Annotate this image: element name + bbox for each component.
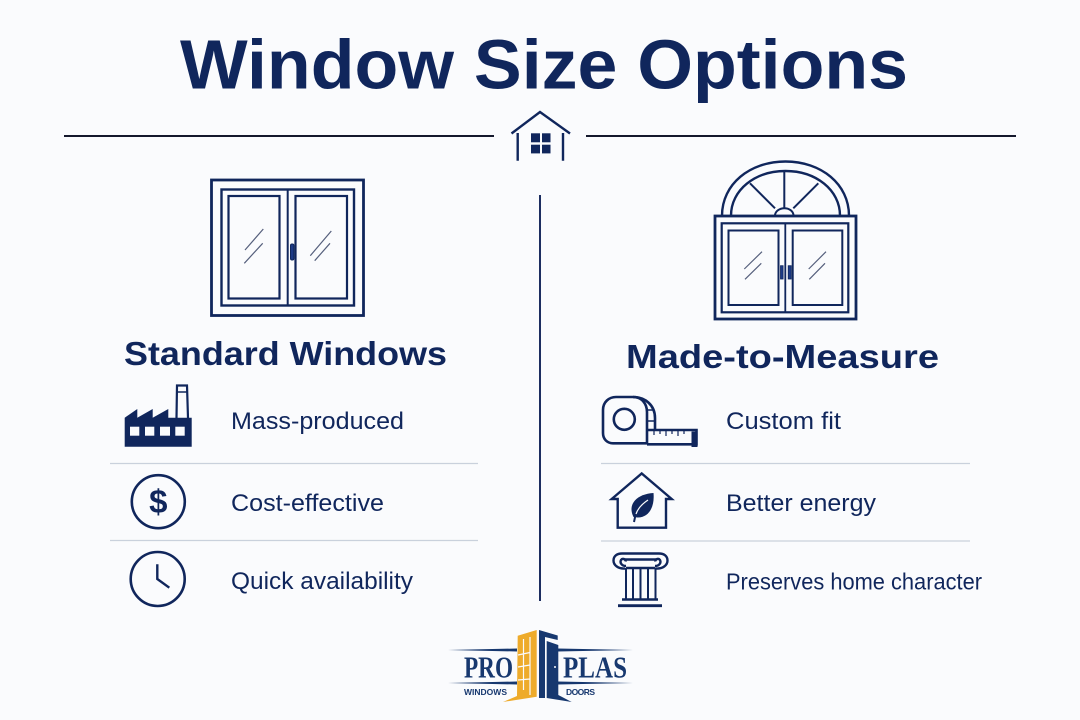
row: custom fit bbox=[603, 397, 841, 446]
icon: column bbox=[614, 554, 668, 606]
heading: standard windows: Standard Windows bbox=[124, 335, 447, 372]
logo: Pro Plas Windows Doors bbox=[448, 630, 633, 702]
label: Cost-effective bbox=[231, 490, 384, 517]
label: Mass-produced bbox=[231, 408, 404, 435]
panel: made-to-measure bbox=[601, 162, 982, 606]
panel: standard windows bbox=[110, 180, 478, 606]
label: Custom fit bbox=[726, 408, 841, 435]
icon: house with leaf bbox=[612, 474, 672, 528]
icon: arched window bbox=[715, 162, 856, 319]
row: quick availability bbox=[131, 552, 414, 606]
row: cost-effective bbox=[132, 475, 384, 528]
icon: blue door bbox=[539, 630, 572, 702]
icon: tape measure bbox=[603, 397, 697, 446]
header divider with house icon bbox=[64, 112, 1016, 161]
row: better energy bbox=[612, 474, 877, 528]
icon: dollar bbox=[132, 475, 185, 528]
label: Quick availability bbox=[231, 568, 414, 595]
label: Preserves home character bbox=[726, 568, 982, 594]
logo: Pro Plas Windows Doors: WINDOWS bbox=[464, 687, 507, 697]
label: Better energy bbox=[726, 490, 877, 517]
title: Window Size Options bbox=[180, 26, 908, 104]
icon: yellow window bbox=[503, 630, 537, 702]
logo: Pro Plas Windows Doors: PLAS bbox=[563, 649, 627, 684]
icon: standard double window bbox=[212, 180, 364, 316]
icon: house bbox=[512, 112, 570, 161]
icon: factory bbox=[125, 386, 192, 447]
row: preserves home character bbox=[614, 554, 982, 606]
heading: made-to-measure: Made-to-Measure bbox=[626, 338, 939, 375]
icon: dollar: $ bbox=[149, 483, 167, 520]
logo wordmark: PRO bbox=[464, 649, 513, 684]
icon: clock bbox=[131, 552, 185, 606]
center vertical divider bbox=[539, 195, 541, 601]
logo: Pro Plas Windows Doors: DOORS bbox=[566, 687, 595, 697]
row: mass-produced bbox=[125, 386, 404, 447]
